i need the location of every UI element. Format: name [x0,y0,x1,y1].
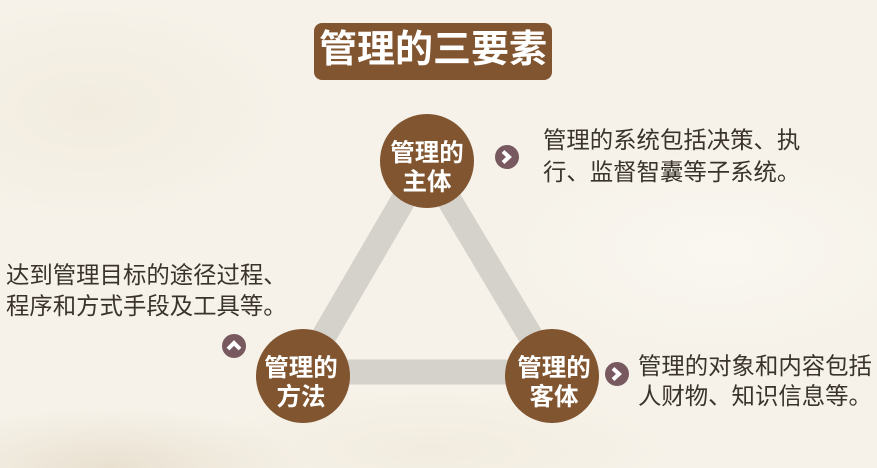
text: subject description [543,127,800,185]
text: method description: 达到管理目标的途径过程、 [6,262,287,288]
node: 管理的客体: 客体 [530,384,578,411]
text: object description [638,353,872,409]
node: 管理的主体: 管理的 [390,140,464,167]
node: 管理的主体 [380,114,474,208]
icon: up arrow left [222,334,246,358]
icon: right arrow top [495,145,519,169]
icon: right arrow bottom [605,362,629,386]
text: subject description: 行、监督智囊等子系统。 [543,159,800,185]
text: method description: 程序和方式手段及工具等。 [6,293,287,319]
title: 管理的三要素 [319,29,547,71]
node: 管理的方法: 管理的 [264,355,338,382]
node: 管理的方法: 方法 [276,384,326,411]
node: 管理的方法 [256,329,350,423]
node: 管理的主体: 主体 [402,169,452,196]
node: 管理的客体: 管理的 [517,355,591,382]
text: subject description: 管理的系统包括决策、执 [543,127,800,153]
text: method description [6,262,287,319]
text: object description: 管理的对象和内容包括 [638,353,872,379]
text: object description: 人财物、知识信息等。 [638,383,872,409]
node: 管理的客体 [505,329,599,423]
